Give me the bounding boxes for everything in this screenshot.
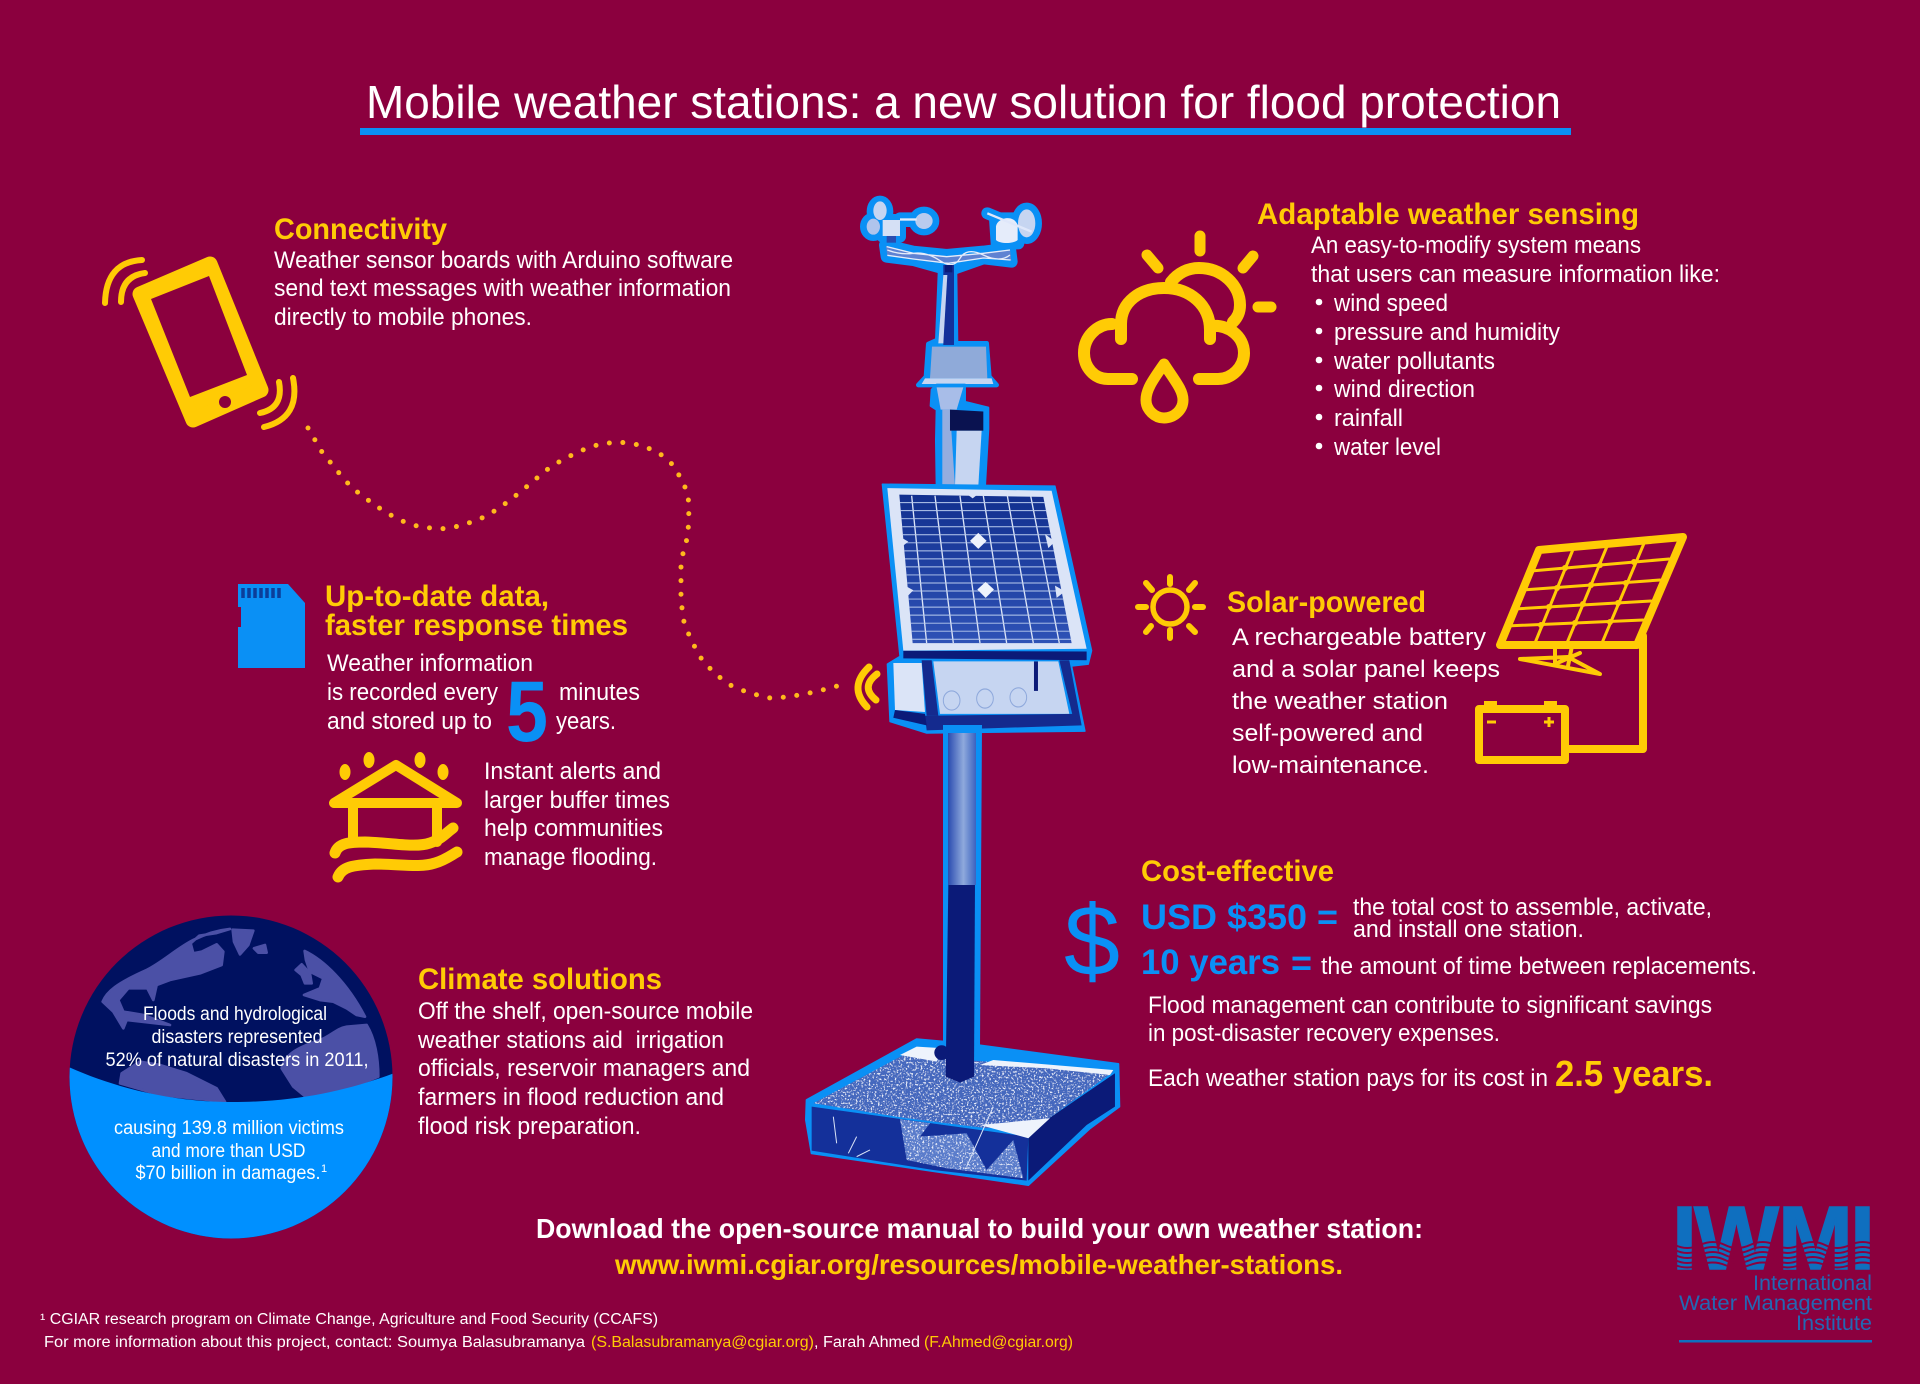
text block: cost-effective: Flood management can contribute to significant savings bbox=[1148, 992, 1712, 1019]
text block: adaptable weather sensing: pressure and humidity bbox=[1334, 319, 1560, 346]
text block: connectivity bbox=[274, 213, 733, 331]
text block: climate solutions: farmers in flood reduction and bbox=[418, 1084, 724, 1111]
text block: climate solutions: Climate solutions bbox=[418, 963, 662, 996]
text block: adaptable weather sensing: An easy-to-modify system means bbox=[1311, 232, 1641, 259]
logo: IWMI: Water Management bbox=[1679, 1292, 1872, 1315]
text block: instant alerts: help communities bbox=[484, 815, 663, 842]
icon: SD memory card bbox=[238, 584, 305, 668]
text block: instant alerts bbox=[484, 758, 670, 871]
logo: IWMI: International bbox=[1753, 1272, 1872, 1295]
globe with flood statistics: $70 billion in damages. bbox=[136, 1163, 320, 1184]
text block: cost-effective bbox=[1141, 855, 1757, 1094]
call to action: download manual bbox=[536, 1213, 1423, 1280]
globe with flood statistics: Floods and hydrological bbox=[143, 1004, 327, 1025]
footnotes: ¹ CGIAR research program on Climate Change, Agriculture and Food Security (CCAFS) bbox=[40, 1311, 658, 1328]
globe with flood statistics: 1 bbox=[321, 1163, 327, 1175]
text block: connectivity: send text messages with weather information bbox=[274, 275, 731, 302]
footnotes: , Farah Ahmed bbox=[814, 1334, 920, 1351]
text block: solar-powered: low-maintenance. bbox=[1232, 752, 1429, 779]
text block: up-to-date data: 5 bbox=[506, 664, 548, 760]
text block: cost-effective: = bbox=[1317, 898, 1338, 937]
text block: adaptable weather sensing: water pollutants bbox=[1333, 348, 1495, 375]
junction box bbox=[933, 661, 1069, 714]
text block: cost-effective: USD $350 bbox=[1141, 898, 1307, 937]
text block: up-to-date data: is recorded every bbox=[327, 679, 498, 706]
text block: cost-effective: = bbox=[1291, 944, 1312, 983]
text block: solar-powered: self-powered and bbox=[1232, 720, 1423, 747]
anemometer and upper mast bbox=[866, 201, 1036, 385]
logo: IWMI: IWMI bbox=[1672, 1189, 1875, 1289]
text block: up-to-date data: minutes bbox=[559, 679, 640, 706]
text block: climate solutions bbox=[417, 963, 753, 1140]
text block: solar-powered bbox=[1227, 586, 1500, 779]
icon: mobile phone bbox=[105, 260, 294, 427]
text block: solar-powered: A rechargeable battery bbox=[1232, 624, 1486, 651]
text block: instant alerts: Instant alerts and bbox=[484, 758, 661, 785]
globe with flood statistics: and more than USD bbox=[152, 1141, 306, 1162]
icon: solar panel and battery bbox=[1479, 537, 1683, 760]
text block: adaptable weather sensing: wind speed bbox=[1333, 290, 1448, 317]
text block: cost-effective: in post-disaster recovery expenses. bbox=[1148, 1020, 1500, 1047]
text block: connectivity: Connectivity bbox=[274, 213, 447, 246]
footnotes: (S.Balasubramanya@cgiar.org) bbox=[591, 1334, 814, 1351]
text block: up-to-date data: Weather information bbox=[327, 650, 533, 677]
text block: adaptable weather sensing: rainfall bbox=[1334, 405, 1403, 432]
text block: solar-powered: and a solar panel keeps bbox=[1232, 656, 1500, 683]
icon: dollar sign: $ bbox=[1064, 885, 1120, 997]
call to action: download manual: Download the open-source manual to build your own weather station: bbox=[536, 1213, 1423, 1244]
text block: cost-effective: 10 years bbox=[1141, 943, 1280, 982]
text block: adaptable weather sensing: that users can measure information like: bbox=[1311, 261, 1720, 288]
text block: cost-effective: and install one station. bbox=[1353, 916, 1584, 943]
text block: instant alerts: manage flooding. bbox=[484, 844, 657, 871]
text block: cost-effective: Each weather station pays for its cost in bbox=[1148, 1065, 1548, 1092]
footnotes: For more information about this project, contact: Soumya Balasubramanya bbox=[44, 1334, 585, 1351]
text block: cost-effective: the total cost to assemble, activate, bbox=[1353, 894, 1712, 921]
icon: weather cloud, sun and raindrop bbox=[1084, 236, 1271, 418]
text block: cost-effective: 2.5 years. bbox=[1555, 1053, 1713, 1094]
globe with flood statistics: causing 139.8 million victims bbox=[114, 1118, 344, 1139]
globe with flood statistics: disasters represented bbox=[152, 1027, 322, 1048]
text block: climate solutions: officials, reservoir managers and bbox=[418, 1055, 750, 1082]
text block: connectivity: Weather sensor boards with Arduino software bbox=[274, 247, 733, 274]
lower pole bbox=[943, 725, 982, 1048]
logo: IWMI: Institute bbox=[1796, 1312, 1872, 1335]
dotted connection line bbox=[308, 428, 841, 698]
text block: up-to-date data: and stored up to bbox=[327, 708, 492, 735]
concrete base bbox=[806, 885, 1119, 1185]
text block: solar-powered: the weather station bbox=[1232, 688, 1448, 715]
icon: flooded house bbox=[334, 752, 457, 877]
text block: up-to-date data: faster response times bbox=[325, 609, 628, 642]
text block: solar-powered: Solar-powered bbox=[1227, 586, 1426, 619]
solar panel bbox=[882, 484, 1092, 733]
text block: adaptable weather sensing: Adaptable weather sensing bbox=[1257, 198, 1639, 231]
text block: adaptable weather sensing bbox=[1257, 198, 1720, 461]
globe with flood statistics bbox=[70, 916, 392, 1238]
text block: climate solutions: Off the shelf, open-source mobile bbox=[418, 998, 753, 1025]
text block: cost-effective: Cost-effective bbox=[1141, 855, 1334, 888]
text block: adaptable weather sensing: wind direction bbox=[1333, 376, 1475, 403]
call to action: download manual: www.iwmi.cgiar.org/resources/mobile-weather-stations. bbox=[614, 1249, 1343, 1280]
icon: wireless signal at station bbox=[858, 667, 877, 707]
icon: small sun bbox=[1138, 577, 1203, 638]
logo: IWMI bbox=[1672, 1189, 1875, 1342]
text block: climate solutions: flood risk preparation. bbox=[418, 1113, 641, 1140]
text block: up-to-date data: Up-to-date data, bbox=[325, 580, 549, 613]
text block: instant alerts: larger buffer times bbox=[484, 787, 670, 814]
text block: connectivity: directly to mobile phones. bbox=[274, 304, 532, 331]
weather station photo bbox=[806, 201, 1119, 1185]
text block: adaptable weather sensing: water level bbox=[1333, 434, 1441, 461]
text block: up-to-date data bbox=[325, 580, 640, 760]
text block: up-to-date data: years. bbox=[556, 708, 616, 735]
footnotes: (F.Ahmed@cgiar.org) bbox=[924, 1334, 1073, 1351]
text block: climate solutions: weather stations aid irrigation bbox=[417, 1027, 724, 1054]
title: Mobile weather stations: a new solution for flood protection bbox=[366, 76, 1561, 128]
globe with flood statistics: 52% of natural disasters in 2011, bbox=[106, 1050, 368, 1071]
footnotes bbox=[40, 1311, 1073, 1351]
text block: cost-effective: the amount of time between replacements. bbox=[1321, 953, 1757, 980]
